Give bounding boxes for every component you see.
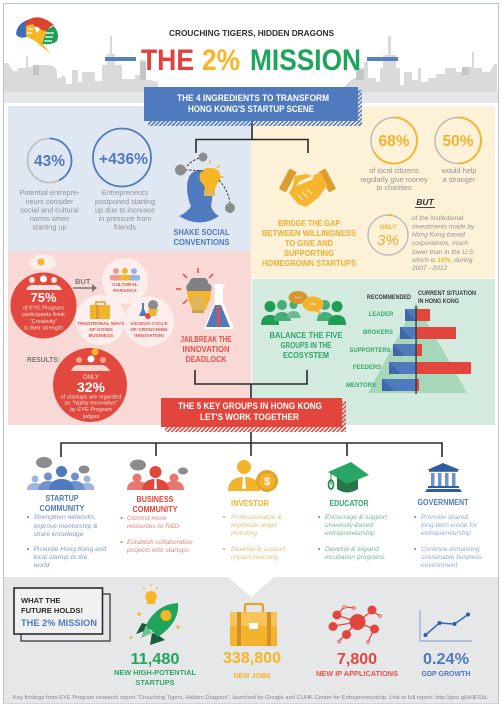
stat: 43%: 43%: [34, 153, 65, 170]
group: educator: Encourage & support: [325, 514, 388, 521]
callout: what the future holds: THE 2% MISSION: [21, 618, 97, 629]
arrow: but: BUT: [75, 277, 91, 286]
group: business community: Commit more: [127, 515, 167, 522]
group: educator: entrepreneurship: [325, 530, 375, 537]
connector: groups: [61, 432, 442, 457]
stat: gdp growth: GDP GROWTH: [422, 669, 470, 678]
group: startup community: world: [34, 562, 50, 569]
stat: 75%: participants think: [22, 312, 65, 318]
icon: business people: [127, 460, 188, 490]
panel: bridge the gap: [251, 106, 495, 278]
skyline: [4, 36, 498, 103]
banner: 5 key groups: THE 5 KEY GROUPS IN HONG KONG: [178, 401, 322, 411]
footer note: Key findings from EYE Program research report “Crouching Tigers, Hidden Dragons”, launched by Google and CUHK Center for Entrepreneurship. Link to full report: http://goo.gl/zHESbL: [13, 695, 488, 701]
stat: startups: STARTUPS: [136, 678, 174, 687]
group: educator: incubation programs: [325, 554, 385, 561]
stat: ip applications: 7,800: [337, 651, 377, 668]
title: THE: [141, 44, 194, 77]
group: startup community: local startup to the: [34, 554, 88, 561]
stat: +436%: postponed starting: [95, 197, 155, 206]
stat: 68%: [360, 118, 428, 192]
stat: +436%: up due to increase: [95, 206, 155, 214]
pyramid bar chart: RECOMMENDED: [367, 295, 412, 301]
callout: what the future holds: FUTURE HOLDS!: [21, 606, 83, 615]
text: institutional investments: [411, 215, 475, 272]
stat: 32%: 32%: [77, 379, 106, 395]
group: investor: INVESTOR: [231, 499, 269, 508]
stat: 32%: [53, 348, 127, 422]
heading: HOMEGROWN STARTUPS: [262, 259, 357, 268]
stat: 32%: ONLY: [83, 375, 99, 381]
stat: 43%: norms when: [30, 214, 69, 223]
heading: DEADLOCK: [186, 355, 227, 364]
heading: [262, 219, 357, 268]
bubble: vicious cycle: OF CROUCHING: [130, 327, 168, 333]
group: government: Promote shared: [421, 514, 468, 521]
stat: 32%: as “highly innovative”: [64, 400, 118, 406]
group: startup community: COMMUNITY: [40, 503, 85, 513]
callout: what the future holds: [14, 588, 110, 641]
icon: startup people: [27, 457, 94, 490]
stat: 43%: social and cultural: [20, 206, 79, 214]
subtitle: CROUCHING TIGERS, HIDDEN DRAGONS: [169, 28, 334, 38]
text: institutional investments: investments made by: [412, 224, 475, 230]
icon: brain bulb and flask: [176, 268, 234, 329]
stat: 68%: of local citizens: [369, 166, 419, 175]
bubble: traditional ways: BUSINESS: [89, 333, 114, 339]
icon: head with light bulb: [175, 152, 235, 222]
stat: jobs: [223, 650, 281, 680]
icon: government building: [425, 463, 462, 492]
group: investor: Develop & support: [231, 546, 286, 553]
banner: 5 key groups: [161, 398, 346, 432]
group: government: GOVERNMENT: [418, 498, 469, 507]
stat: +436%: in pressure from: [99, 214, 151, 223]
stat: 3%: ONLY: [380, 224, 397, 231]
group: business community: projects with startups: [126, 547, 190, 554]
icon: graduation cap: [328, 462, 369, 492]
group: business community: BUSINESS: [136, 494, 174, 504]
group: government: long-term vision for: [421, 522, 478, 529]
group: government: Continue enhancing: [421, 546, 480, 553]
group: business community: COMMUNITY: [132, 504, 178, 514]
pyramid bar chart: CURRENT SITUATION: [418, 291, 476, 297]
text: institutional investments: 2007 - 2012: [411, 265, 448, 272]
bubble: cultural paradox: [102, 258, 148, 304]
banner: 5 key groups: LET'S WORK TOGETHER: [200, 412, 299, 422]
but label: BUT: [416, 197, 435, 207]
heading: BETWEEN WILLINGNESS: [262, 229, 357, 238]
stat: 68%: regularly give money: [360, 175, 428, 184]
results label: RESULTS:: [27, 357, 60, 364]
bubble: traditional ways: TRADITIONAL WAYS: [77, 321, 126, 327]
title: [105, 44, 398, 77]
icon: thought cloud: [30, 254, 56, 270]
heading: BALANCE THE FIVE: [270, 331, 343, 340]
heading: ECOSYSTEM: [283, 351, 329, 360]
group: government: sustainable business: [421, 554, 483, 561]
pyramid bar chart: FEEDERS: [353, 365, 381, 371]
pyramid bar chart: SUPPORTERS: [349, 348, 391, 354]
group: startup community: STARTUP: [46, 493, 79, 503]
stat: 75%: [10, 272, 76, 338]
stat: 50%: would help: [441, 166, 476, 175]
stat: 50%: 50%: [442, 133, 474, 150]
pyramid bar chart: LEADER: [369, 312, 394, 318]
title: 2%: [202, 44, 240, 77]
stat: 43%: Potential entrepre-: [19, 188, 80, 197]
stat: jobs: 338,800: [223, 650, 281, 667]
group: educator: EDUCATOR: [330, 499, 369, 508]
text: institutional investments: lower than in the U.S.: [412, 249, 475, 256]
group: investor: legitimize angel: [231, 522, 277, 529]
bubble: cultural paradox: CULTURAL: [112, 282, 138, 288]
heading: TO GIVE AND: [285, 239, 333, 248]
bubble: traditional ways: OF DOING: [89, 327, 113, 333]
stat: 75%: “Creativity”: [30, 319, 57, 325]
bubble: traditional ways: [76, 295, 126, 345]
stat: +436%: Entrepreneurs: [102, 188, 148, 197]
group: investor: investing: [231, 530, 257, 537]
line chart: gdp growth: [420, 610, 472, 641]
stat: ip applications: NEW IP APPLICATIONS: [316, 669, 398, 678]
group: business community: Establish collaborative: [127, 539, 193, 546]
heading: SUPPORTING: [284, 249, 334, 258]
stat: startups: [114, 651, 196, 687]
group: educator: Develop & expand: [325, 546, 379, 553]
bubble: vicious cycle: [124, 296, 174, 346]
stat: 50%: [435, 118, 481, 184]
stat: 32%: of startups are regarded: [61, 394, 121, 400]
group: investor: [223, 460, 286, 561]
heading: [180, 335, 232, 364]
stat: +436%: friends: [114, 222, 136, 232]
stat: +436%: +436%: [99, 151, 148, 168]
stat: 3%: 3%: [377, 232, 399, 249]
heading: SHAKE SOCIAL: [174, 228, 230, 237]
banner: 4 ingredients: THE 4 INGREDIENTS TO TRANSFORM: [177, 93, 329, 103]
panel: balance the five groups: [252, 279, 495, 425]
stat: gdp growth: [422, 651, 470, 678]
group: business community: [120, 460, 193, 554]
connector: middle: [195, 370, 307, 400]
heading: [270, 331, 343, 360]
heading: GROUPS IN THE: [280, 341, 332, 350]
pyramid bar chart: BROKERS: [363, 330, 393, 336]
title: MISSION: [250, 44, 361, 77]
stat: jobs: NEW JOBS: [234, 671, 270, 680]
panel: future holds: [4, 577, 498, 704]
group: investor: Professionalize &: [231, 514, 283, 521]
callout: what the future holds: WHAT THE: [21, 596, 60, 605]
group: startup community: Strengthen networks,: [34, 514, 96, 521]
text: institutional investments: which is 16%, during: [412, 257, 473, 264]
icon: handshake: [279, 168, 336, 207]
banner: 4 ingredients: [144, 87, 362, 126]
stat: 32%: judges: [82, 414, 100, 420]
text: institutional investments: Hong Kong based: [412, 232, 465, 238]
heading: BRIDGE THE GAP: [278, 219, 341, 228]
group: educator: [318, 462, 388, 561]
arrow: but: [73, 277, 97, 292]
group: educator: university-based: [325, 522, 373, 529]
bubble: vicious cycle: INNOVATION: [134, 333, 164, 339]
stat: ip applications: [316, 651, 398, 678]
icon: people with speech bubbles: [261, 291, 346, 325]
stat: gdp growth: 0.24%: [423, 651, 469, 668]
stat: +436%: [93, 128, 155, 232]
icon: investor and coin: $: [264, 476, 270, 488]
pyramid bar chart: MENTORS: [346, 383, 376, 389]
group: government: environment: [421, 562, 458, 569]
panel: shake social conventions: [8, 106, 251, 251]
logo: [16, 17, 58, 54]
group: startup community: share knowledge: [34, 531, 84, 538]
heading: JAILBREAK THE: [180, 335, 232, 344]
stat: 68%: 68%: [378, 133, 410, 150]
stat: 50%: a stranger: [443, 175, 476, 184]
banner: 4 ingredients: HONG KONG'S STARTUP SCENE: [188, 104, 314, 114]
stat: startups: NEW HIGH-POTENTIAL: [114, 668, 196, 677]
stat: 75%: of EYE Program: [23, 306, 64, 312]
connector: top: [196, 120, 308, 153]
bubble: cultural paradox: PARADOX: [113, 288, 138, 294]
stat: 43%: [19, 138, 80, 232]
stat: 75%: 75%: [30, 290, 57, 305]
group: startup community: improve mentorship &: [34, 523, 98, 530]
group: government: entrepreneurship: [421, 530, 471, 537]
text: institutional investments: of the institutional: [412, 215, 464, 222]
stat: 43%: neurs consider: [26, 197, 74, 206]
stat: 43%: starting up: [32, 222, 67, 232]
pyramid bar chart: IN HONG KONG: [418, 299, 459, 305]
text: institutional investments: corporations, much: [412, 240, 468, 247]
group: government: [414, 463, 483, 569]
stat: 75%: is their strength: [24, 326, 63, 332]
pyramid bar chart: [346, 291, 476, 394]
icon: network: [328, 606, 381, 643]
icon: briefcase: [230, 604, 277, 646]
stat: 3%: [368, 215, 408, 255]
heading: INNOVATION: [182, 345, 230, 354]
bubble: vicious cycle: VICIOUS CYCLE: [130, 321, 168, 327]
group: business community: resources to R&D: [127, 523, 179, 530]
heading: [174, 228, 230, 247]
icon: rocket: [130, 584, 180, 645]
stat: 32%: by EYE Program: [70, 407, 112, 413]
group: startup community: Promote Hong Kong and: [34, 546, 106, 553]
heading: CONVENTIONS: [174, 238, 230, 247]
group: investor: impact investing: [231, 554, 279, 561]
stat: startups: 11,480: [130, 651, 180, 668]
group: startup community: [27, 457, 106, 569]
panel: jailbreak: [8, 251, 251, 425]
stat: 68%: to charities: [376, 183, 412, 192]
